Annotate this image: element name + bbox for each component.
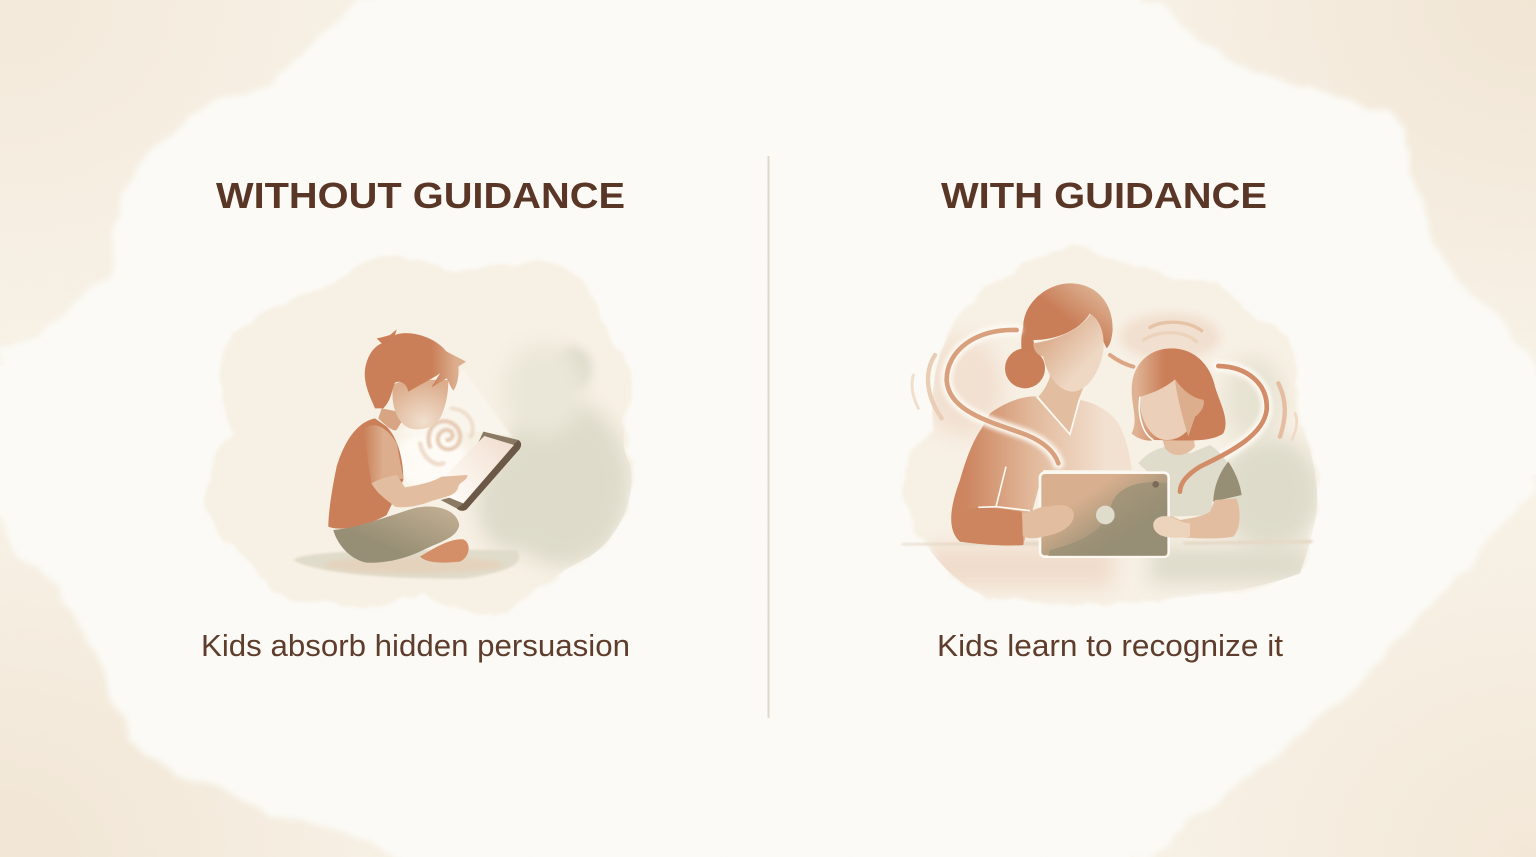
parent arm seam — [978, 467, 1030, 511]
child shirt — [1138, 445, 1242, 517]
parent forearm shade — [953, 508, 1023, 545]
child hand — [1153, 516, 1190, 538]
table line — [902, 540, 1313, 546]
watercolor wash — [903, 243, 1320, 603]
child hair edge glow — [1139, 397, 1153, 440]
parent collar — [1037, 397, 1079, 434]
child hair back — [1132, 348, 1226, 441]
illustration: child alone with tablet — [205, 253, 633, 615]
shared tablet — [1040, 473, 1169, 557]
parent hair — [1021, 283, 1113, 355]
flowing guidance ribbons — [912, 322, 1297, 492]
floor shadow — [293, 550, 519, 579]
parent face — [1033, 314, 1104, 392]
caption: with guidance: Kids learn to recognize it — [937, 628, 1283, 663]
boy hair — [365, 329, 466, 408]
parent hair bun — [1005, 348, 1045, 388]
child face side shadow — [1175, 379, 1204, 437]
watercolor wash — [205, 253, 633, 615]
caption: without guidance: Kids absorb hidden persuasion — [201, 628, 630, 663]
divider — [768, 156, 770, 718]
child face — [1140, 379, 1204, 440]
boy foot — [420, 539, 469, 563]
child ribbon over shirt — [1180, 366, 1267, 492]
hypnotic spiral — [420, 408, 473, 464]
light beam and glow — [400, 370, 512, 437]
child forearm — [1153, 498, 1240, 538]
tablet camera — [1152, 481, 1159, 488]
child sleeve — [1213, 462, 1242, 502]
tablet — [441, 432, 521, 511]
boy arm — [372, 475, 467, 507]
heading: with guidance: WITH GUIDANCE — [941, 175, 1267, 216]
heading: without guidance: WITHOUT GUIDANCE — [216, 175, 625, 216]
boy legs — [333, 506, 459, 563]
illustration: parent and child with tablet — [902, 243, 1320, 603]
boy sleeve highlight — [363, 425, 403, 485]
child neck — [1162, 437, 1195, 455]
tablet button — [1096, 506, 1115, 524]
parent body — [951, 396, 1132, 545]
boy neck — [378, 408, 407, 430]
parent neck — [1038, 353, 1087, 433]
parent hand — [1023, 505, 1074, 538]
boy face — [392, 380, 448, 429]
boy torso — [328, 418, 403, 529]
